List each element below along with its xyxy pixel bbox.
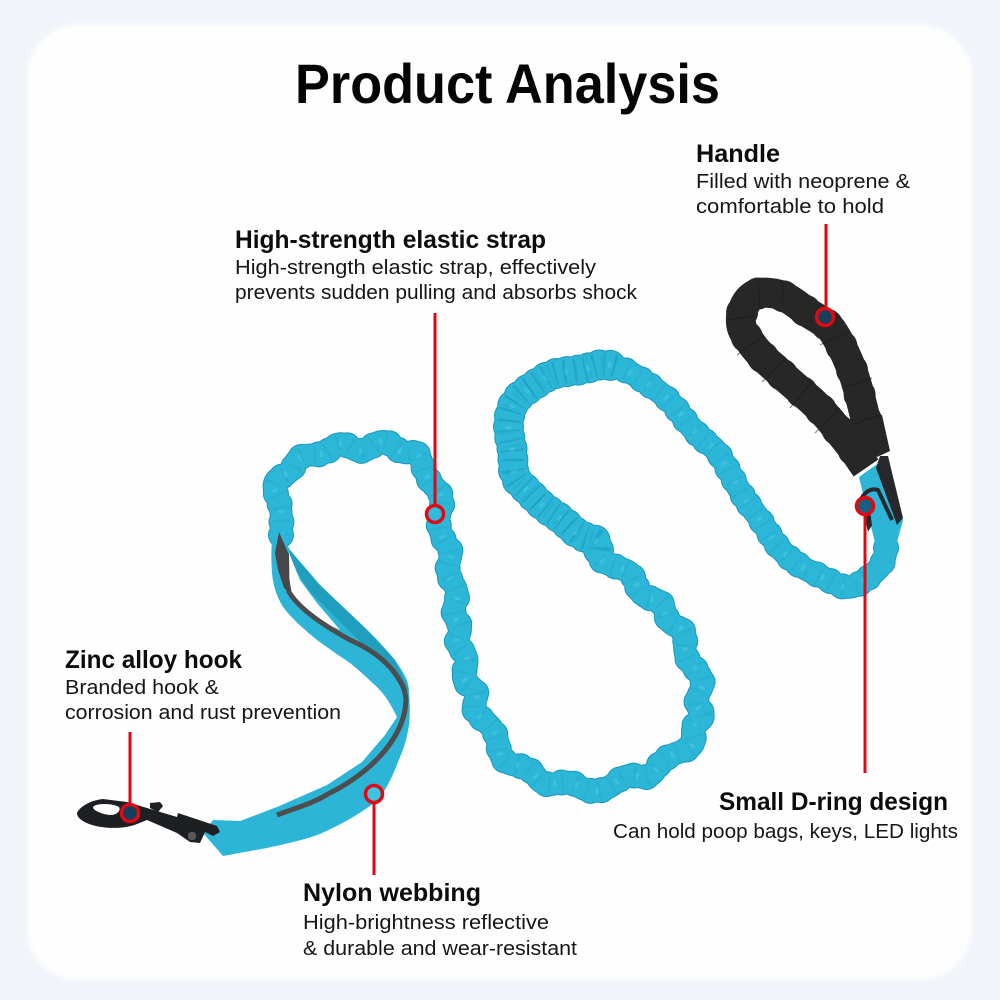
callout: zinc alloy hook: corrosion and rust prevention (65, 702, 341, 724)
callout: nylon webbing (303, 786, 577, 960)
callout: high-strength elastic strap: High-strength elastic strap, effectively (235, 257, 596, 279)
callout: nylon webbing: Nylon webbing (303, 879, 481, 907)
small D-ring and handle base (859, 456, 903, 588)
gap between webbing layers (289, 553, 340, 630)
elastic bungee section (274, 365, 886, 791)
neoprene liner (277, 580, 406, 815)
callout: high-strength elastic strap: prevents sudden pulling and absorbs shock (235, 282, 638, 304)
callout: high-strength elastic strap: High-strength elastic strap (235, 226, 546, 254)
callout: zinc alloy hook: Zinc alloy hook (65, 646, 242, 674)
foam handle (728, 281, 890, 468)
callout: zinc alloy hook: Branded hook & (65, 677, 220, 699)
icon: zinc alloy hook (77, 799, 220, 843)
callout: handle: Filled with neoprene & (696, 171, 911, 193)
callout: nylon webbing: & durable and wear-resistant (303, 938, 577, 960)
callout: high-strength elastic strap (235, 226, 638, 522)
callout: small D-ring design (613, 498, 958, 843)
callout: handle: comfortable to hold (696, 196, 884, 218)
callout: small D-ring design: Can hold poop bags, keys, LED lights (613, 821, 958, 843)
callout: nylon webbing: High-brightness reflective (303, 912, 549, 934)
callout: zinc alloy hook (65, 646, 341, 822)
nylon webbing section (203, 530, 410, 856)
callout: handle (696, 140, 911, 326)
callout: handle: Handle (696, 140, 780, 168)
title: Product Analysis (295, 52, 720, 115)
callout: small D-ring design: Small D-ring design (719, 788, 948, 816)
